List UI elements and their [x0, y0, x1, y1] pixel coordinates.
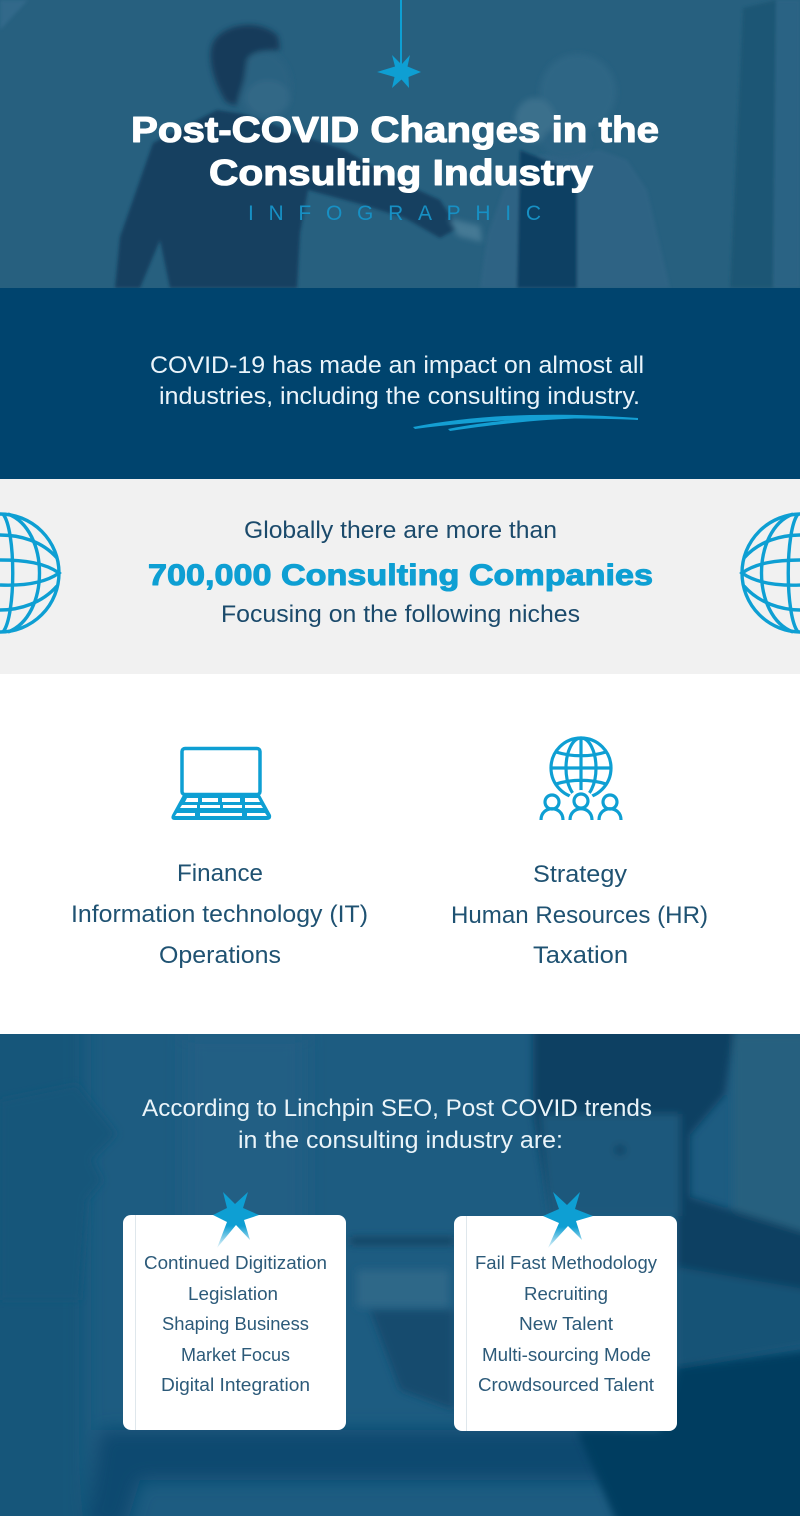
right card list: Recruiting — [524, 1284, 608, 1304]
statistic lead-in: Globally there are more than — [244, 517, 557, 544]
icon: right globe — [742, 514, 800, 632]
statistic headline: 700,000 Consulting Companies — [148, 559, 653, 592]
intro text: COVID-19 has made an impact on almost all — [150, 352, 644, 379]
statistic follow-up: Focusing on the following niches — [221, 601, 580, 628]
panel: global statistic band — [0, 479, 800, 674]
intro text — [150, 352, 644, 410]
right card list: Fail Fast Methodology — [475, 1253, 657, 1273]
brush underline — [413, 415, 638, 431]
section intro text: According to Linchpin SEO, Post COVID trends — [142, 1095, 652, 1122]
card: right trends — [454, 1192, 677, 1431]
niche list: right column: Human Resources (HR) — [451, 902, 708, 929]
niche list: left column: Finance — [177, 860, 263, 887]
panel: introduction band — [0, 288, 800, 479]
subtitle: INFOGRAPHIC — [248, 202, 541, 225]
left card list — [144, 1253, 327, 1395]
card: left trends — [123, 1192, 346, 1430]
title: Consulting Industry — [209, 152, 593, 193]
niche list: right column: Strategy — [533, 861, 627, 888]
icon: right card star — [543, 1192, 593, 1248]
left card list: Shaping Business — [162, 1314, 309, 1334]
left card list: Continued Digitization — [144, 1253, 327, 1273]
niche list: left column: Information technology (IT) — [71, 901, 368, 928]
icon: left globe — [0, 514, 59, 632]
right card list — [475, 1253, 657, 1395]
section intro text: in the consulting industry are: — [238, 1127, 563, 1154]
star line and star icon — [377, 0, 421, 88]
section intro text — [142, 1095, 652, 1154]
left card list: Market Focus — [181, 1345, 290, 1365]
left card list: Digital Integration — [161, 1375, 310, 1395]
icon: globe with people — [541, 738, 621, 820]
intro text: industries, including the consulting industry. — [159, 383, 640, 410]
niche list: right column: Taxation — [533, 942, 628, 969]
right card list: Crowdsourced Talent — [478, 1375, 654, 1395]
right card list: New Talent — [519, 1314, 613, 1334]
panel: post-COVID trends — [0, 1000, 800, 1516]
right card list: Multi-sourcing Mode — [482, 1345, 651, 1365]
left card list: Legislation — [188, 1284, 278, 1304]
niche list: right column — [451, 861, 708, 969]
title: Post-COVID Changes in the — [131, 109, 659, 150]
icon: left card star — [213, 1192, 259, 1248]
icon: laptop — [171, 748, 271, 820]
niche list: left column — [71, 860, 368, 969]
panel: hero header — [0, 0, 800, 288]
title — [131, 109, 659, 193]
panel: consulting niches — [0, 674, 800, 1034]
niche list: left column: Operations — [159, 942, 281, 969]
